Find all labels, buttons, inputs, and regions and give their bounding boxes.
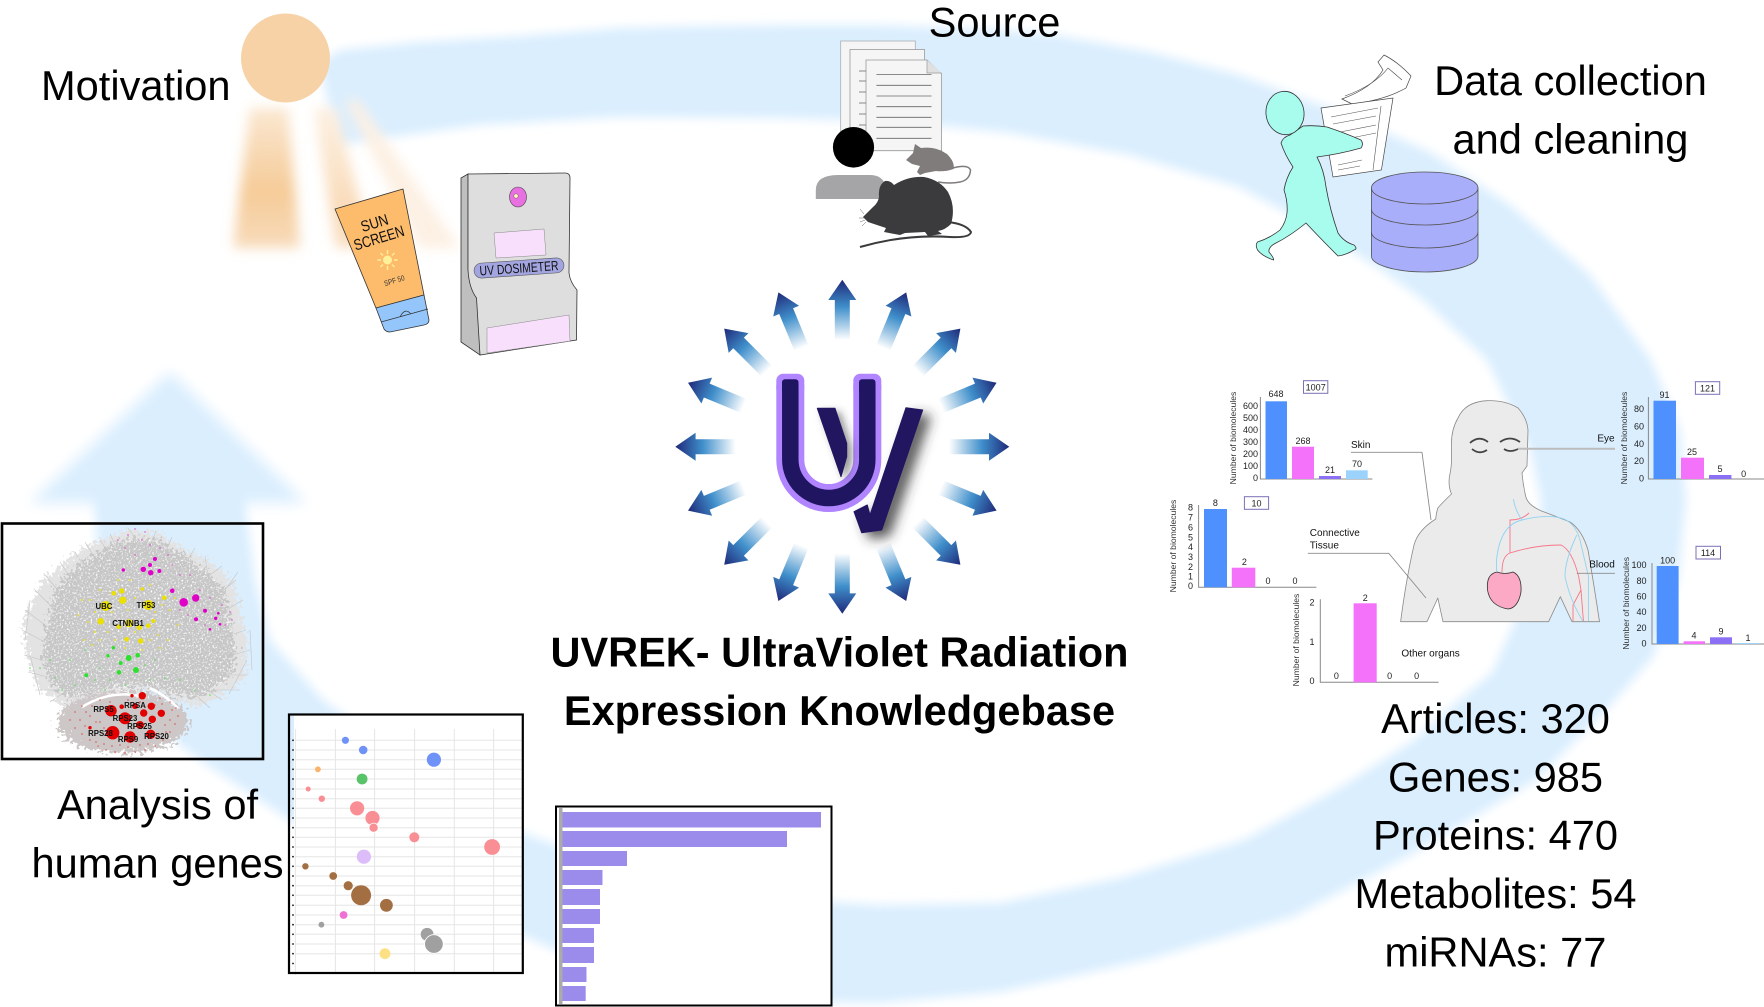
heading: Analysis of human genes: Analysis of [57,781,259,828]
ticks: 0 [1309,676,1315,686]
title: Expression Knowledgebase [564,687,1115,734]
bars [1266,401,1368,479]
ticks: 0 [1253,473,1258,483]
ticks: 5 [1188,532,1193,542]
chart: blood [1577,546,1764,650]
icon: person carrying papers [1256,55,1411,260]
values [1213,498,1298,586]
arrow 0 [828,280,856,340]
green nodes [84,646,140,677]
values: 0 [1387,671,1392,681]
ticks: 200 [1243,449,1258,459]
panel: bar chart [556,806,832,1006]
logo: UV [776,374,923,533]
ticks: 100 [1243,461,1258,471]
arrow 112.5 [936,475,1002,524]
connective tissue label: Tissue [1310,540,1339,551]
heading: Data collection and cleaning: Data collection [1434,57,1707,104]
sun rays [233,100,460,248]
arrow 315 [714,319,777,381]
total: 10 [1251,498,1262,508]
small yellow nodes [78,580,178,650]
panel: protein network [2,524,263,759]
cycle arrow head [30,372,306,503]
gene labels: UBC [96,602,113,611]
ticks [1631,560,1646,648]
arrow 67.5 [936,370,1002,419]
magenta nodes [122,557,221,631]
ticks: 300 [1243,437,1258,447]
bar [1354,603,1377,682]
frame [556,806,832,1006]
bars [1654,401,1731,479]
ticks: 60 [1634,422,1644,432]
values: 25 [1687,447,1697,457]
ticks [1309,598,1315,686]
arteries [1502,513,1583,621]
stats: Proteins: 470 [1373,812,1618,858]
panel: bubble chart [289,714,523,975]
gene labels: RPS25 [127,722,153,731]
ticks: 80 [1634,404,1644,414]
ticks: 0 [1188,581,1193,591]
gridlines [295,729,522,975]
ticks: 40 [1634,439,1644,449]
values: 8 [1213,498,1218,508]
chart: eye [1518,382,1764,484]
icon: radiating arrows [675,280,1009,614]
axis title: Number of biomolecules [1621,557,1631,650]
skin label: Skin [1351,440,1370,451]
icon: UV dosimeter [461,173,577,355]
ticks: 100 [1631,560,1646,570]
heading: Data collection and cleaning: and cleaning [1453,116,1688,162]
icon: sunscreen tube: SPF 50 [383,273,406,288]
arrow 22.5 [870,287,919,353]
values: 268 [1295,436,1311,446]
values: 0 [1414,671,1419,681]
small green nodes [30,650,210,695]
values: 100 [1660,556,1675,566]
icon: UV dosimeter: UV DOSIMETER [479,258,559,279]
veins [1496,499,1588,621]
values: 0 [1741,469,1746,479]
ticks: 500 [1243,413,1258,423]
bars [1657,566,1759,644]
arrow 292.5 [683,370,749,419]
bars [562,812,821,1001]
total [1304,381,1328,393]
values: 1 [1745,633,1751,643]
ticks: 20 [1634,456,1644,466]
ticks: 4 [1188,542,1193,552]
axis title: Number of biomolecules [1168,500,1178,592]
title: UVREK- UltraViolet Radiation [550,628,1129,676]
gene labels: RPS28 [88,729,114,738]
leader [1518,448,1615,450]
bubbles [302,737,500,959]
gene labels: RPS23 [113,714,138,723]
icon: human subject [816,127,884,199]
ticks [1188,502,1193,591]
values [1660,556,1751,643]
ticks [1243,401,1258,483]
arrow 135 [908,512,970,575]
ticks: 60 [1636,592,1646,602]
arrow 45 [908,319,970,381]
leader [1308,553,1426,598]
connective tissue label: Connective [1310,528,1360,539]
icon: documents [841,41,942,151]
total [1695,382,1720,394]
arrow 247.5 [683,475,749,524]
ticks [1634,404,1644,484]
total [1696,546,1720,559]
yellow nodes [97,587,167,644]
gene labels: RPS9 [118,735,139,744]
ticks: 1 [1309,637,1315,647]
icon: small mouse [906,144,970,183]
ticks: 1 [1188,572,1193,582]
gene labels: RPSA [124,701,146,710]
red cluster background [57,691,189,753]
frame [289,714,523,973]
ticks: 0 [1641,638,1646,648]
ticks: 600 [1243,401,1258,411]
network edges [22,528,252,708]
icon: large rat [859,177,971,247]
values [1268,389,1362,475]
heading: Analysis of human genes: human genes [31,840,284,886]
values: 21 [1325,465,1335,475]
values: 0 [1334,671,1339,681]
small magenta nodes [118,529,232,625]
ticks: 40 [1636,607,1646,617]
values: 0 [1265,576,1271,586]
stats: Articles: 320 [1381,695,1610,742]
icon: database [1371,172,1478,272]
eyes [1470,438,1520,452]
gene labels: RPS5 [93,705,114,714]
axis title: Number of biomolecules [1619,392,1629,484]
arrow 270 [675,433,736,461]
total: 114 [1701,548,1715,558]
red nodes [88,692,165,743]
leader [1351,452,1431,520]
chart: other organs [1291,593,1460,686]
values: 2 [1242,557,1247,567]
gene labels [88,601,170,744]
gene labels: RPS20 [144,732,170,741]
leader [1577,572,1615,574]
arrow 90 [949,433,1009,461]
heading: Motivation: Motivation [41,62,231,109]
values [1334,593,1419,681]
ticks: 80 [1636,576,1646,586]
small red nodes [70,698,178,753]
ticks: 3 [1188,552,1193,562]
chart: skin [1228,381,1431,520]
ticks: 20 [1636,623,1646,633]
ticks: 2 [1309,598,1315,608]
ticks [292,740,294,973]
ticks: 0 [1639,474,1644,484]
arrow 225 [714,512,777,575]
gene labels: CTNNB1 [112,619,144,628]
arrow 180 [828,553,856,614]
values: 0 [1292,576,1298,586]
arrow 202.5 [765,540,814,606]
axis [559,808,562,1004]
other organs label: Other organs [1401,648,1460,659]
body figure [1401,401,1600,622]
eye label: Eye [1597,434,1615,444]
values: 5 [1717,464,1723,474]
chart: connective tissue [1168,497,1426,598]
values: 70 [1352,459,1362,469]
ticks: 6 [1188,522,1193,532]
values: 9 [1718,626,1724,636]
stats: miRNAs: 77 [1385,928,1606,976]
ticks: 7 [1188,512,1193,522]
arrow 157.5 [870,540,919,606]
total: 1007 [1306,382,1326,392]
bars [1204,509,1255,587]
axis title: Number of biomolecules [1291,594,1301,686]
stats: Metabolites: 54 [1354,870,1637,917]
ticks: 400 [1243,425,1258,435]
stats: Genes: 985 [1388,754,1603,800]
values: 4 [1691,630,1697,640]
sun [241,14,330,102]
values: 91 [1659,390,1670,400]
icon: sunscreen tube [335,189,429,332]
ticks: 8 [1188,502,1193,512]
ticks: 2 [1188,562,1193,572]
values [1659,390,1746,479]
blood label: Blood [1589,560,1615,570]
values: 648 [1268,389,1284,399]
axis title: Number of biomolecules [1228,392,1238,484]
heart [1487,572,1521,609]
arrow 337.5 [765,287,814,353]
icon: sunscreen tube: SCREEN [352,223,407,254]
total [1244,497,1269,509]
gene labels: TP53 [137,601,156,610]
frame [2,524,263,759]
icon: sunscreen tube: SUN [359,211,391,236]
values: 2 [1363,593,1368,603]
total: 121 [1700,383,1715,393]
